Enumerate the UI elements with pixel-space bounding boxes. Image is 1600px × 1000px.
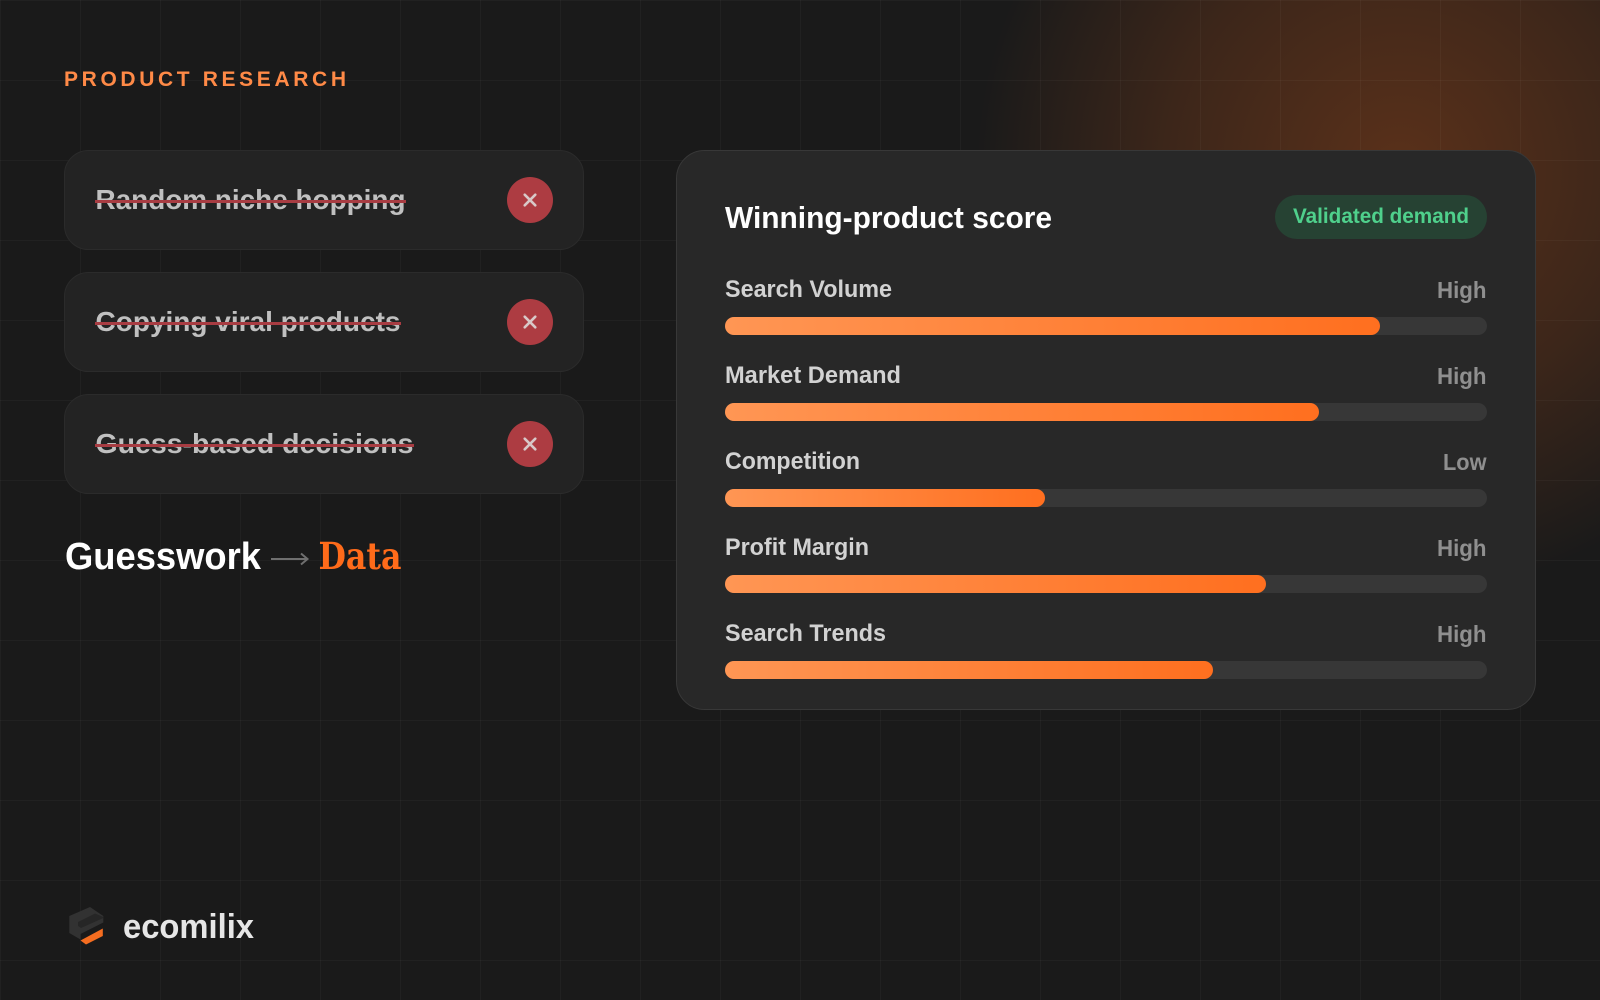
card: guess-based decisions [64, 394, 584, 494]
section label: product research: PRODUCT RESEARCH [64, 68, 346, 91]
panel title: Winning-product score [725, 200, 1052, 235]
row: search trends [725, 620, 1487, 679]
badge: validated demand: Validated demand [1293, 205, 1469, 228]
logo: ecomilix: ecomilix [123, 908, 254, 946]
card: copying viral products: Copying viral products [96, 306, 400, 337]
card: copying viral products [64, 272, 584, 372]
badge: validated demand [1275, 195, 1487, 239]
row: profit margin [725, 534, 1487, 593]
row: market demand: High [1437, 363, 1486, 389]
card: guess-based decisions: Guess-based decisions [96, 428, 414, 459]
row: competition: Competition [725, 448, 860, 475]
card: random niche hopping: Random niche hopping [96, 184, 406, 215]
panel: rejected approaches [64, 150, 584, 494]
logo: ecomilix [69, 907, 254, 946]
row: market demand [725, 362, 1487, 421]
row: search volume [725, 276, 1487, 335]
row: search trends: Search Trends [725, 620, 886, 647]
row: profit margin: Profit Margin [725, 534, 869, 561]
headline: guesswork to data: Guesswork [65, 536, 262, 578]
arrow [271, 554, 308, 564]
headline: guesswork to data: Data [318, 534, 402, 578]
row: search trends: High [1437, 621, 1486, 647]
row: search volume: Search Volume [725, 276, 892, 303]
row: market demand: Market Demand [725, 362, 901, 389]
headline: guesswork to data [65, 534, 402, 578]
icon: logo mark [69, 907, 103, 944]
row: profit margin: High [1437, 535, 1486, 561]
row: competition [725, 448, 1487, 507]
row: competition: Low [1443, 449, 1487, 475]
row: search volume: High [1437, 277, 1486, 303]
panel: winning-product score [676, 150, 1536, 710]
card: random niche hopping [64, 150, 584, 250]
